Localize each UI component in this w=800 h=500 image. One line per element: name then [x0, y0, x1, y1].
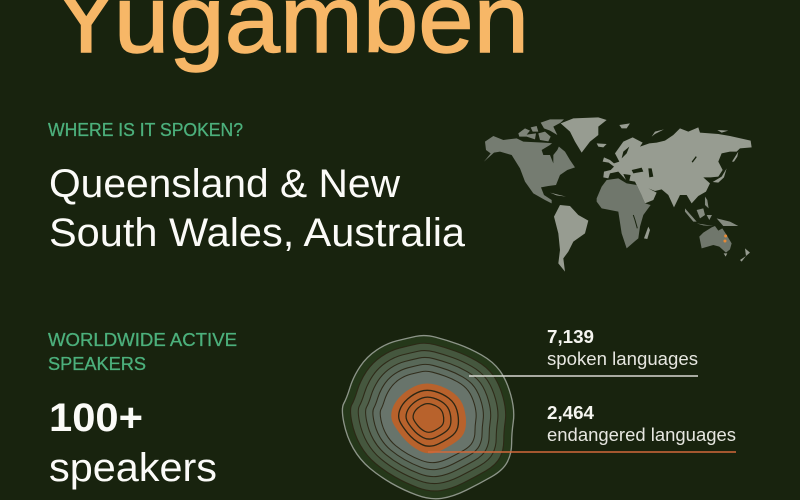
Japan and Kamchatka	[713, 152, 738, 183]
African lakes	[633, 215, 637, 228]
tree ring chart	[342, 336, 514, 499]
heading: worldwide active speakers: WORLDWIDE ACTIVE	[48, 329, 237, 350]
endangered core	[391, 383, 466, 453]
heading: worldwide active speakers	[48, 329, 237, 374]
location text: Queensland & New	[49, 162, 400, 206]
Madagascar	[644, 227, 650, 239]
Tasmania and New Zealand	[724, 248, 750, 262]
Caribbean	[550, 193, 566, 197]
stat: endangered languages: endangered languages	[547, 425, 736, 445]
speaker count	[49, 396, 217, 490]
speaker count: 100+	[49, 396, 143, 440]
Southeast Asia islands	[685, 197, 738, 226]
South America	[554, 205, 588, 272]
heading: worldwide active speakers: SPEAKERS	[48, 353, 146, 374]
North America	[484, 136, 575, 203]
location text	[49, 162, 466, 255]
location markers	[724, 234, 727, 237]
Eurasia	[597, 123, 752, 226]
location text: South Wales, Australia	[49, 211, 466, 255]
speaker count: speakers	[49, 446, 217, 490]
Hudson Bay	[542, 141, 561, 163]
north atlantic and arctic islands	[597, 123, 728, 147]
stat: spoken languages: spoken languages	[547, 349, 698, 369]
stat: endangered languages	[428, 403, 736, 452]
stat: spoken languages	[469, 327, 698, 376]
Arctic Canada	[518, 119, 564, 141]
stat: endangered languages: 2,464	[547, 403, 594, 423]
Africa and South America	[550, 178, 651, 272]
Australia	[699, 226, 732, 253]
heading: where is it spoken: WHERE IS IT SPOKEN?	[48, 119, 243, 140]
Greenland	[561, 117, 607, 153]
inland seas	[622, 147, 697, 177]
outer ring	[342, 336, 514, 499]
middle rings	[351, 343, 506, 491]
stat: spoken languages: 7,139	[547, 327, 594, 347]
world map	[484, 117, 752, 272]
